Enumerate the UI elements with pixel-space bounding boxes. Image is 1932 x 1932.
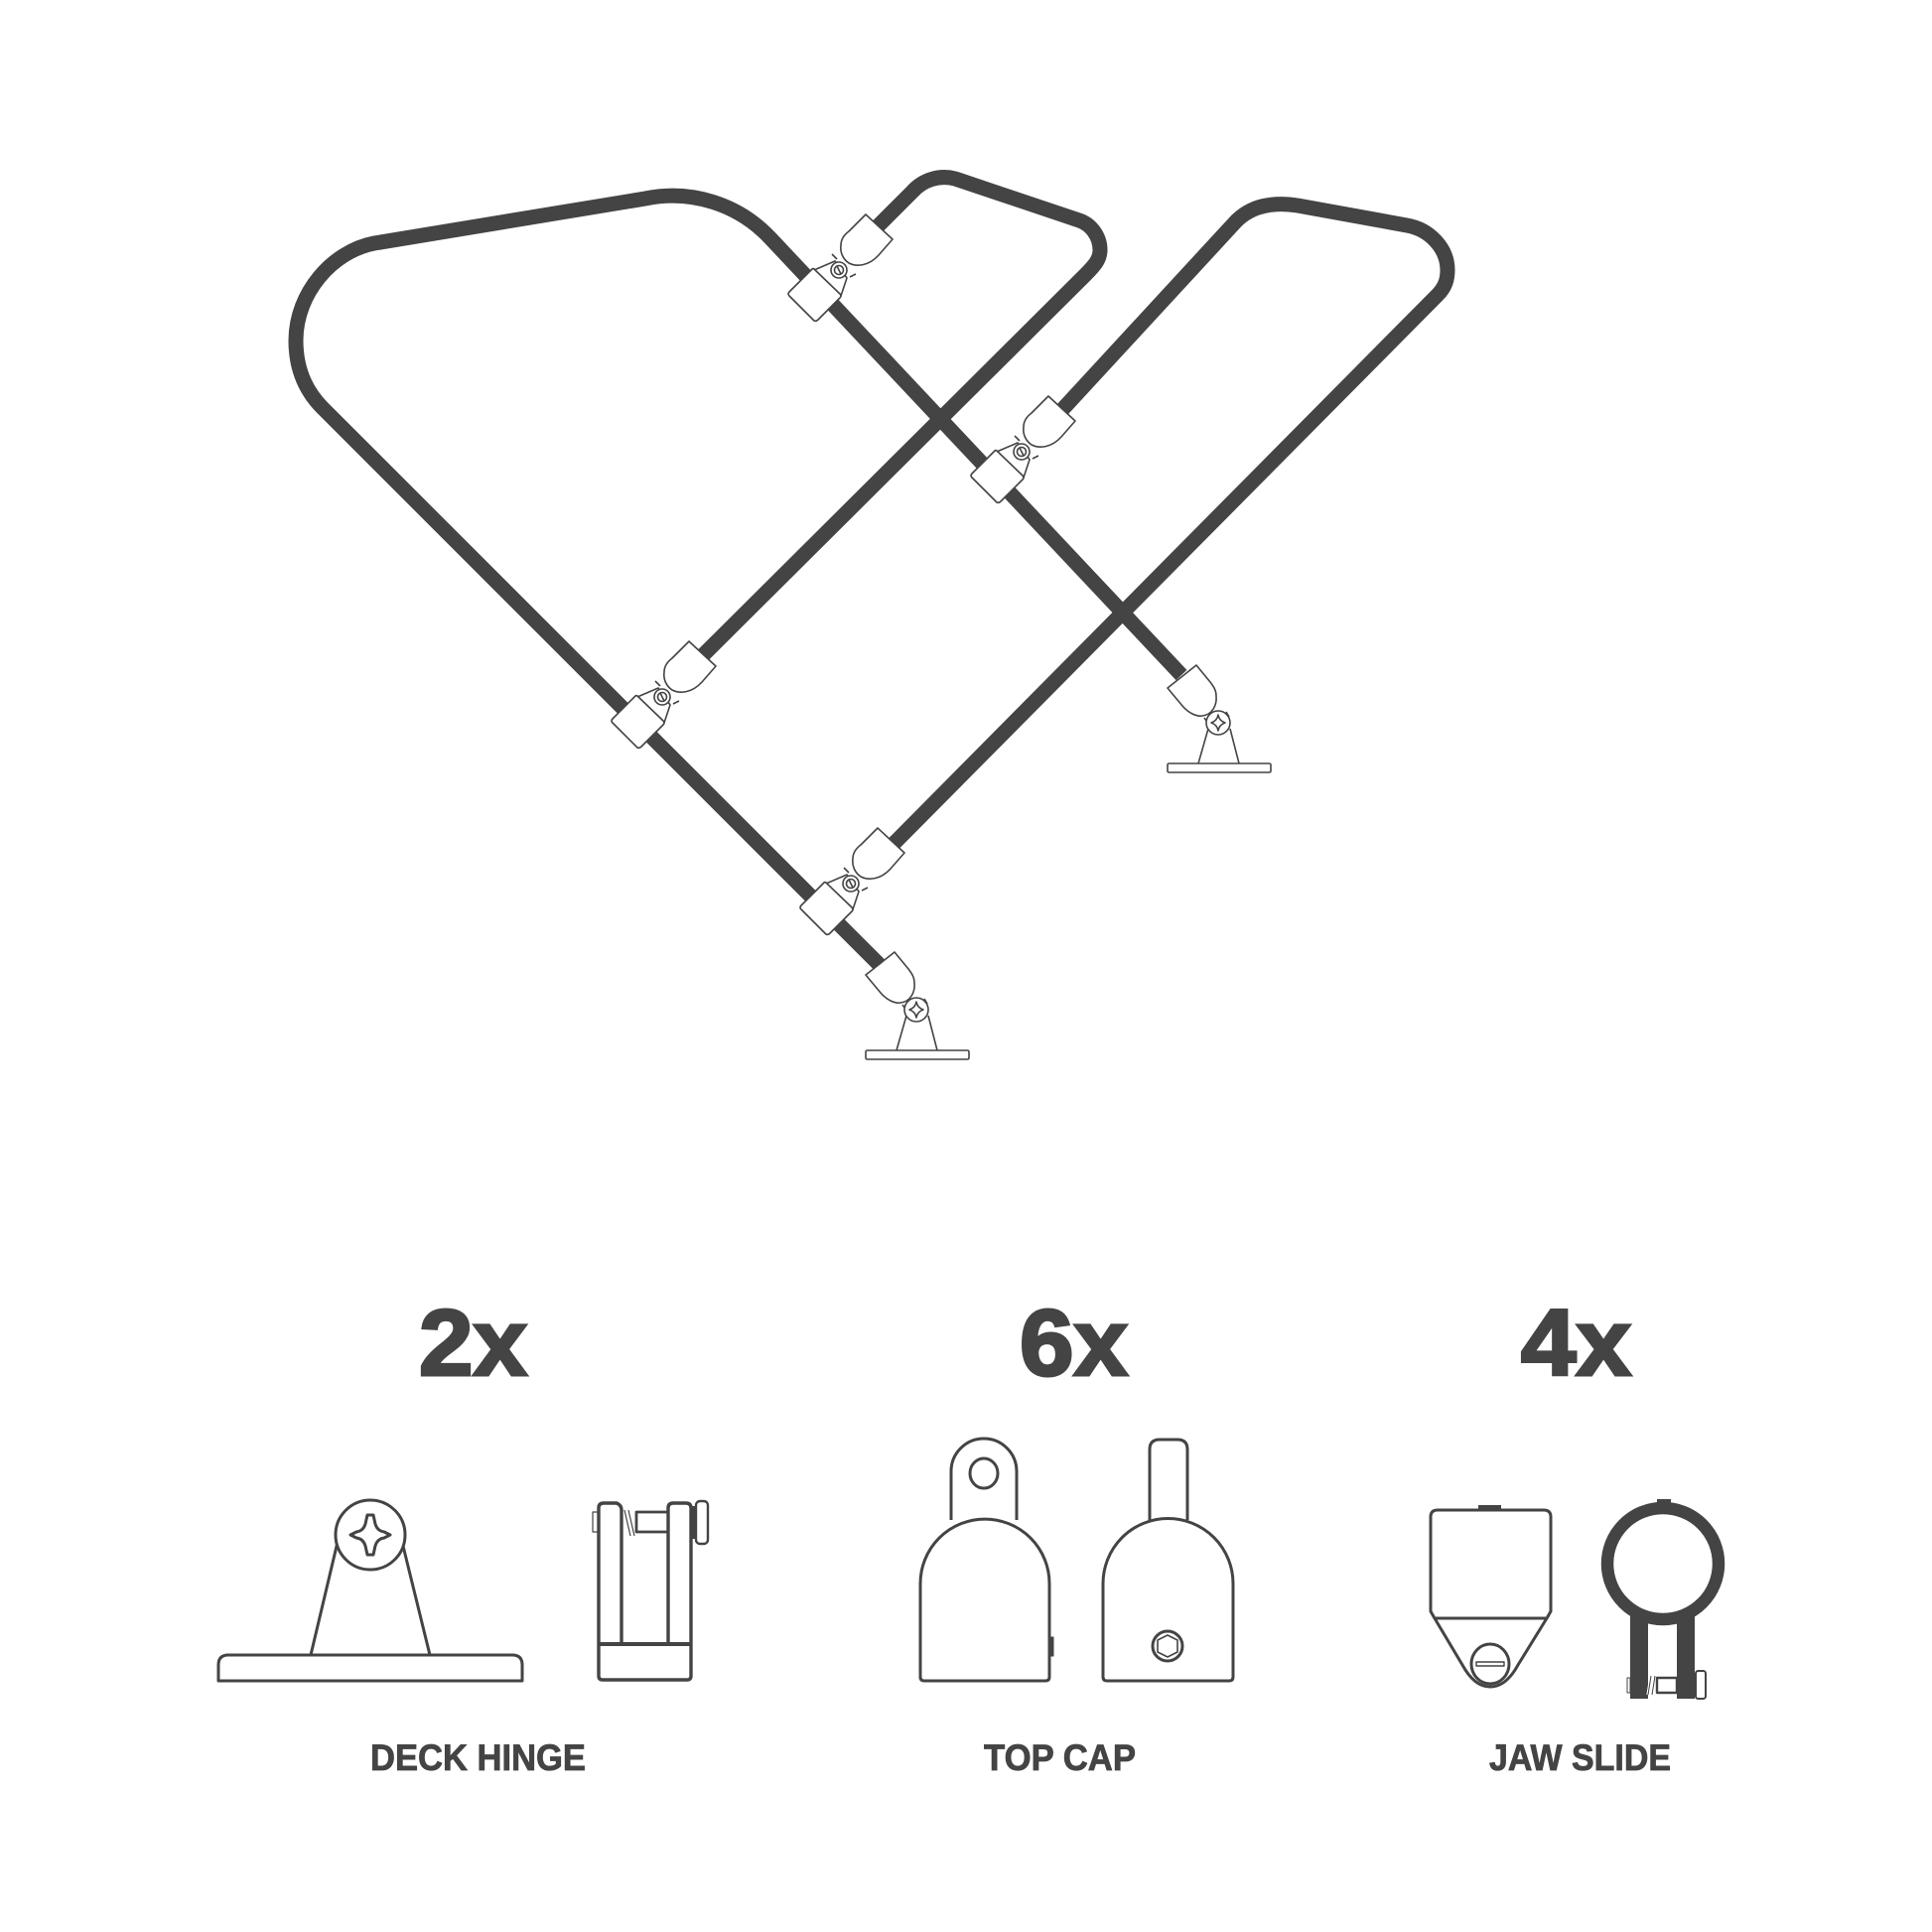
label: deck hinge: DECK HINGE — [370, 1737, 586, 1778]
icon: deck hinge front view — [218, 1500, 522, 1681]
main bow tube — [296, 196, 1181, 972]
icon: top cap side view — [1103, 1440, 1233, 1681]
count: jaw slide: 4x — [1521, 1291, 1631, 1396]
joint: top front — [788, 214, 893, 321]
deck hinge: right foot — [1168, 665, 1271, 772]
rear upper tube — [892, 205, 1448, 846]
bimini frame diagram — [296, 178, 1448, 1059]
count: deck hinge: 2x — [419, 1291, 527, 1396]
label: jaw slide: JAW SLIDE — [1489, 1737, 1671, 1778]
icon: top cap front view — [920, 1439, 1053, 1681]
icon: jaw slide side view — [1607, 1499, 1719, 1699]
deck hinge: lower foot — [866, 952, 969, 1059]
count: top cap: 6x — [1020, 1291, 1128, 1396]
icon: deck hinge side view — [593, 1501, 708, 1680]
label: top cap: TOP CAP — [984, 1737, 1136, 1778]
joint: top rear — [971, 396, 1075, 502]
joint: middle left — [612, 641, 716, 748]
front upper tube — [695, 178, 1100, 663]
joint: lower — [800, 828, 904, 934]
icon: jaw slide front view — [1431, 1505, 1551, 1687]
